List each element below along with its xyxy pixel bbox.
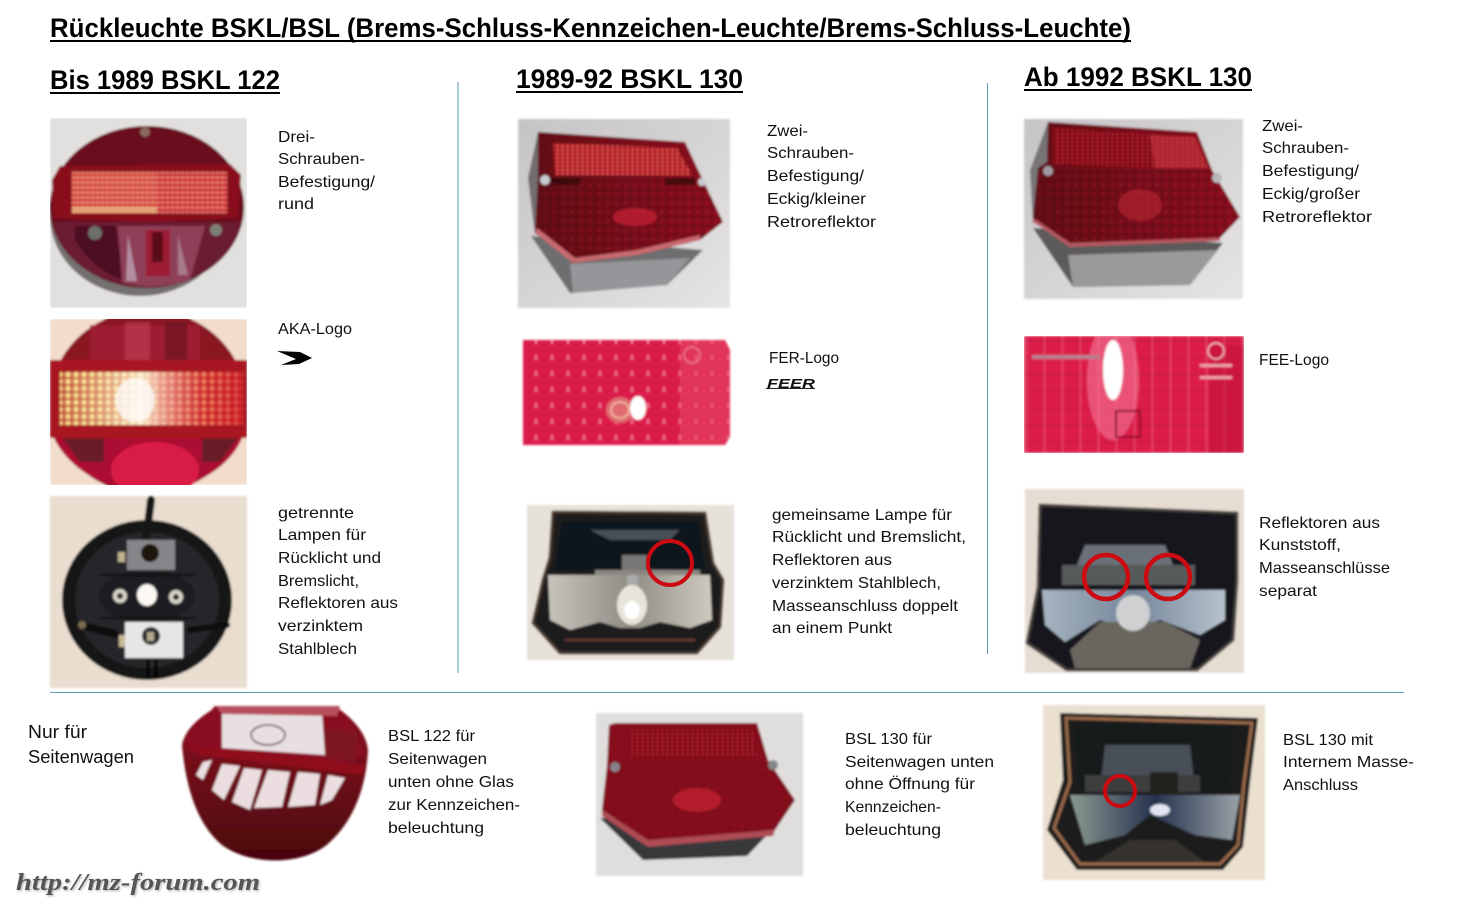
text: sidecar only: Seitenwagen [28,747,134,767]
photo: FER logo close-up [523,340,730,445]
text: AKA logo: AKA-Logo [278,321,352,338]
text: separate lamps: Reflektoren aus [278,595,398,612]
text: common lamp: gemeinsame Lampe für [772,507,953,524]
photo: BSKL 130 from 1992 lens [1024,119,1243,299]
text: BSL 130 description: ohne Öffnung für [845,775,976,793]
callout: red circle, internal ground [1105,776,1135,806]
text: mounting, small reflector [767,123,877,231]
photo: BSL 130 open housing with internal ground [1043,705,1265,880]
photo: FEE logo close-up [1024,336,1244,453]
text: mounting, large reflector: Retroreflektor [1262,209,1373,226]
text: common lamp [772,507,966,637]
text: mounting, large reflector: Schrauben- [1262,140,1349,157]
text: BSL 130 description: Seitenwagen unten [845,754,994,771]
text: separate lamps: Lampen für [278,527,367,544]
photo: round BSKL 122 lens, front [50,118,247,308]
text: BSL 122 description: BSL 122 für [388,728,476,745]
photo: BSKL 130 1989-92 open housing [527,505,734,660]
watermark: http://mz-forum.com [17,871,261,897]
text: BSL 130 internal ground: Anschluss [1283,777,1358,794]
text: BSL 122 description: zur Kennzeichen- [388,797,520,814]
text: plastic reflectors: Reflektoren aus [1259,515,1380,532]
text: mounting, large reflector [1262,118,1373,226]
heading: Bis 1989: Bis 1989 BSKL 122 [50,65,280,95]
text: separate lamps: getrennte [278,505,354,522]
icon: AKA logo [277,351,312,365]
heading: 1989-92: 1989-92 BSKL 130 [516,64,743,94]
icon: FER logo [766,376,816,391]
text: BSL 122 description: unten ohne Glas [388,774,514,791]
text: BSL 130 internal ground: Internem Masse- [1283,754,1414,771]
text: sidecar only [28,722,134,767]
text: mounting, small reflector: Befestigung/ [767,168,865,185]
text: FER logo: FER-Logo [769,350,839,367]
main title: Rückleuchte BSKL/BSL (Brems-Schluss-Kennzeichen-Leuchte/Brems-Schluss-Leuchte) [50,13,1131,43]
callout: red circle, double ground connection [648,541,692,585]
text: BSL 130 description: Kennzeichen- [845,799,941,816]
text: mounting, small reflector: Eckig/kleiner [767,191,867,208]
text: common lamp: Masseanschluss doppelt [772,598,959,615]
text: common lamp: verzinktem Stahlblech, [772,575,941,592]
text: mounting, round: Schrauben- [278,151,365,168]
watermark: http://mz-forum.com [16,870,260,896]
text: plastic reflectors: separat [1259,583,1318,600]
photo: BSKL 130 1989-92 lens [518,119,730,308]
callout: red circles, separate ground connections [1084,555,1190,599]
text: mounting, large reflector: Zwei- [1262,118,1303,135]
text: mounting, round: Drei- [278,129,315,146]
text: mounting, large reflector: Eckig/großer [1262,186,1361,203]
photo: BSKL 130 from 1992 open housing [1025,489,1244,673]
text: separate lamps: Rücklicht und [278,550,381,567]
text: BSL 122 description: Seitenwagen [388,751,487,768]
text: separate lamps [278,505,398,658]
text: common lamp: Rücklicht und Bremslicht, [772,529,966,546]
text: mounting, round [278,129,376,213]
text: separate lamps: Stahlblech [278,641,357,658]
text: plastic reflectors: Kunststoff, [1259,537,1341,554]
text: sidecar only: Nur für [28,722,87,742]
text: common lamp: an einem Punkt [772,620,893,637]
text: BSL 130 internal ground [1283,732,1414,794]
text: common lamp: Reflektoren aus [772,552,892,569]
photo: round lens with AKA logo [50,319,247,485]
text: mounting, round: Befestigung/ [278,174,376,191]
text: BSL 122 description: beleuchtung [388,820,484,837]
text: BSL 130 description: BSL 130 für [845,731,933,748]
photo: BSL 122 sidecar lamp [182,706,368,860]
text: plastic reflectors: Masseanschlüsse [1259,560,1390,577]
text: separate lamps: verzinktem [278,618,363,635]
photo: BSKL 122 housing, rear [50,496,247,688]
heading: Ab 1992: Ab 1992 BSKL 130 [1024,62,1252,92]
text: separate lamps: Bremslicht, [278,573,359,590]
text: mounting, small reflector: Zwei- [767,123,808,140]
text: plastic reflectors [1259,515,1390,600]
text: BSL 122 description [388,728,520,837]
text: BSL 130 internal ground: BSL 130 mit [1283,732,1374,749]
text: mounting, round: rund [278,196,314,213]
text: BSL 130 description: beleuchtung [845,822,941,839]
text: FEE logo: FEE-Logo [1259,352,1329,369]
icon: FER logo: FEER [767,376,816,391]
text: BSL 130 description [845,731,994,839]
text: mounting, large reflector: Befestigung/ [1262,163,1360,180]
photo: BSL 130 sidecar lamp [596,713,803,876]
text: mounting, small reflector: Retroreflektor [767,214,877,231]
text: mounting, small reflector: Schrauben- [767,145,854,162]
